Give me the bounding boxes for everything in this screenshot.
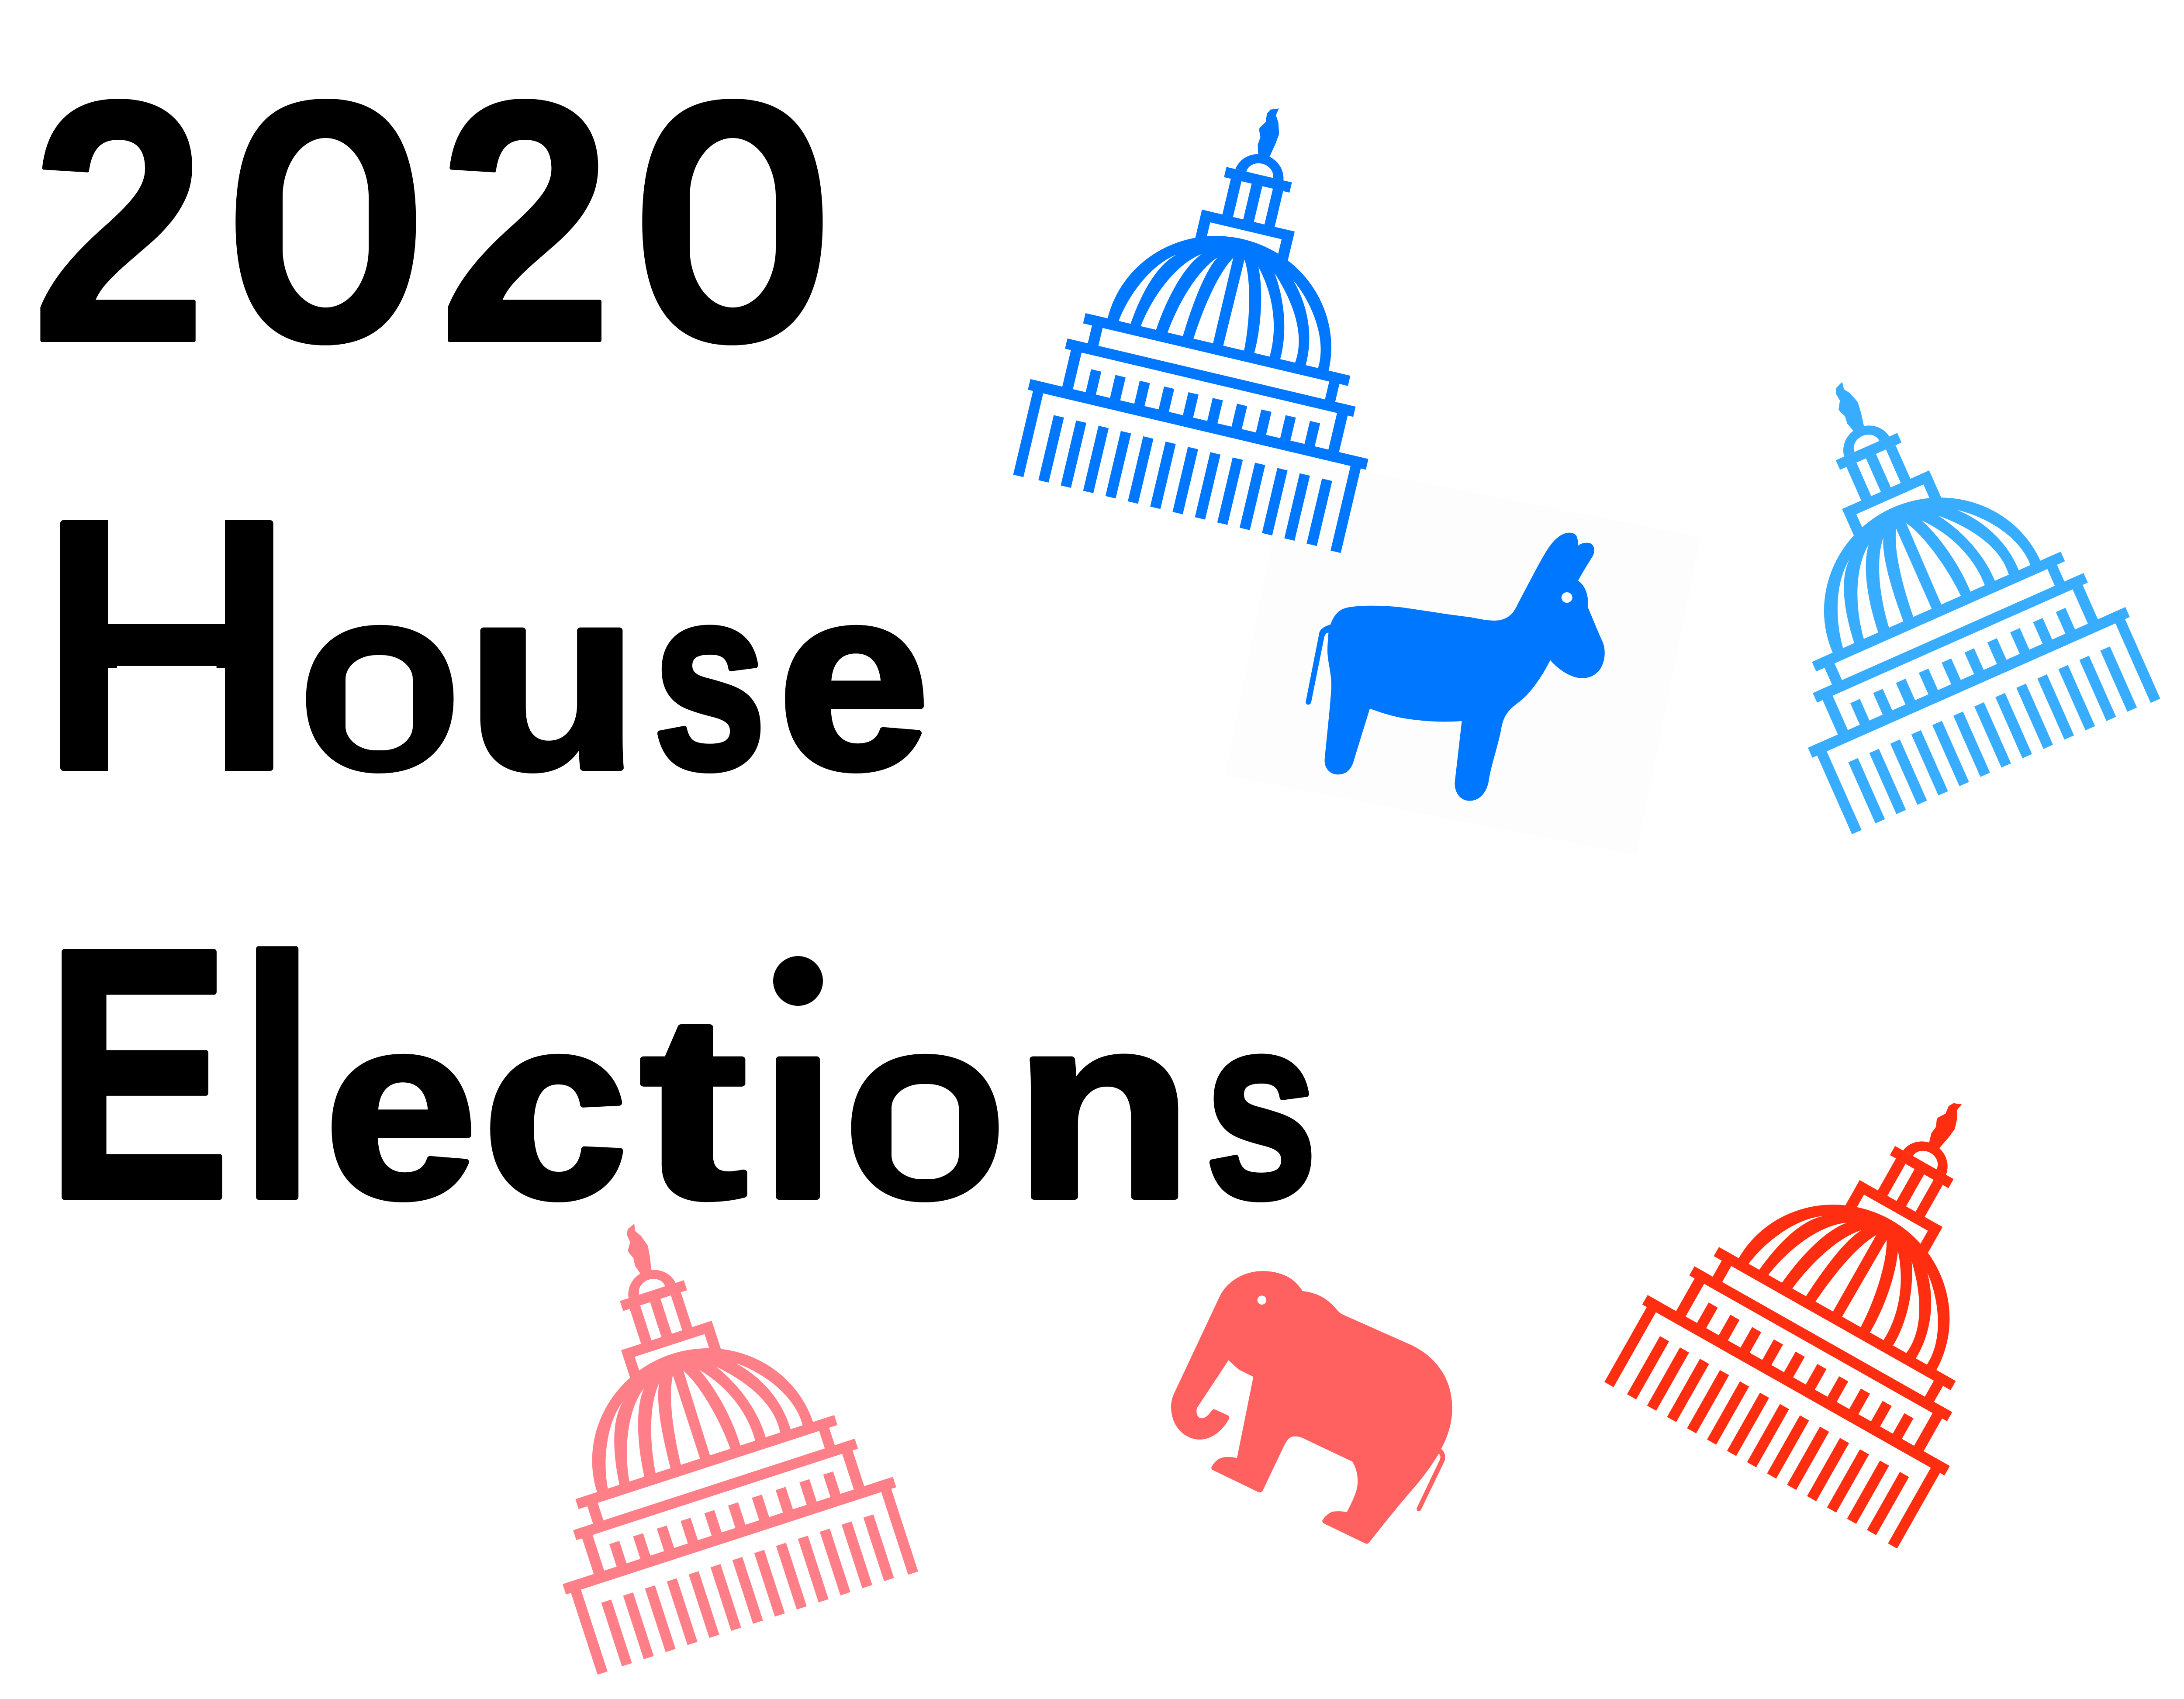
heading line: House: e <box>778 533 930 823</box>
heading line: 2020: 2 <box>31 29 207 413</box>
heading line: 2020: 0 <box>223 29 429 413</box>
icon: democratic donkey <box>1306 533 1605 801</box>
heading line: House: H <box>40 446 294 843</box>
letter refinements: counters of H, 0 and o, round dot of i <box>108 138 959 1179</box>
heading line: House: s <box>653 533 767 823</box>
heading line: Elections: e <box>324 962 477 1252</box>
icon: light blue capitol dome <box>1678 314 2165 837</box>
icon: republican elephant <box>1171 1271 1452 1544</box>
heading line: Elections: t <box>640 962 747 1252</box>
card: pale backdrop behind donkey <box>1225 457 1700 855</box>
heading line: House: u <box>466 533 639 823</box>
heading line: 2020: 2 <box>439 29 612 413</box>
heading line: Elections: c <box>483 962 628 1252</box>
heading line: House: o <box>299 533 461 823</box>
icon: red capitol dome <box>1600 1016 2108 1551</box>
heading line: Elections: l <box>239 887 315 1269</box>
icon: pink capitol dome <box>463 1172 923 1677</box>
icon: blue capitol dome <box>1008 67 1442 554</box>
title: 2020 House Elections <box>31 29 1317 1272</box>
heading line: Elections: E <box>45 875 231 1272</box>
heading line: Elections: n <box>1014 962 1193 1252</box>
heading line: Elections: i <box>760 962 836 1252</box>
heading line: Elections: s <box>1205 962 1317 1252</box>
heading line: 2020: 0 <box>629 29 836 413</box>
heading line: Elections: o <box>844 962 1006 1252</box>
